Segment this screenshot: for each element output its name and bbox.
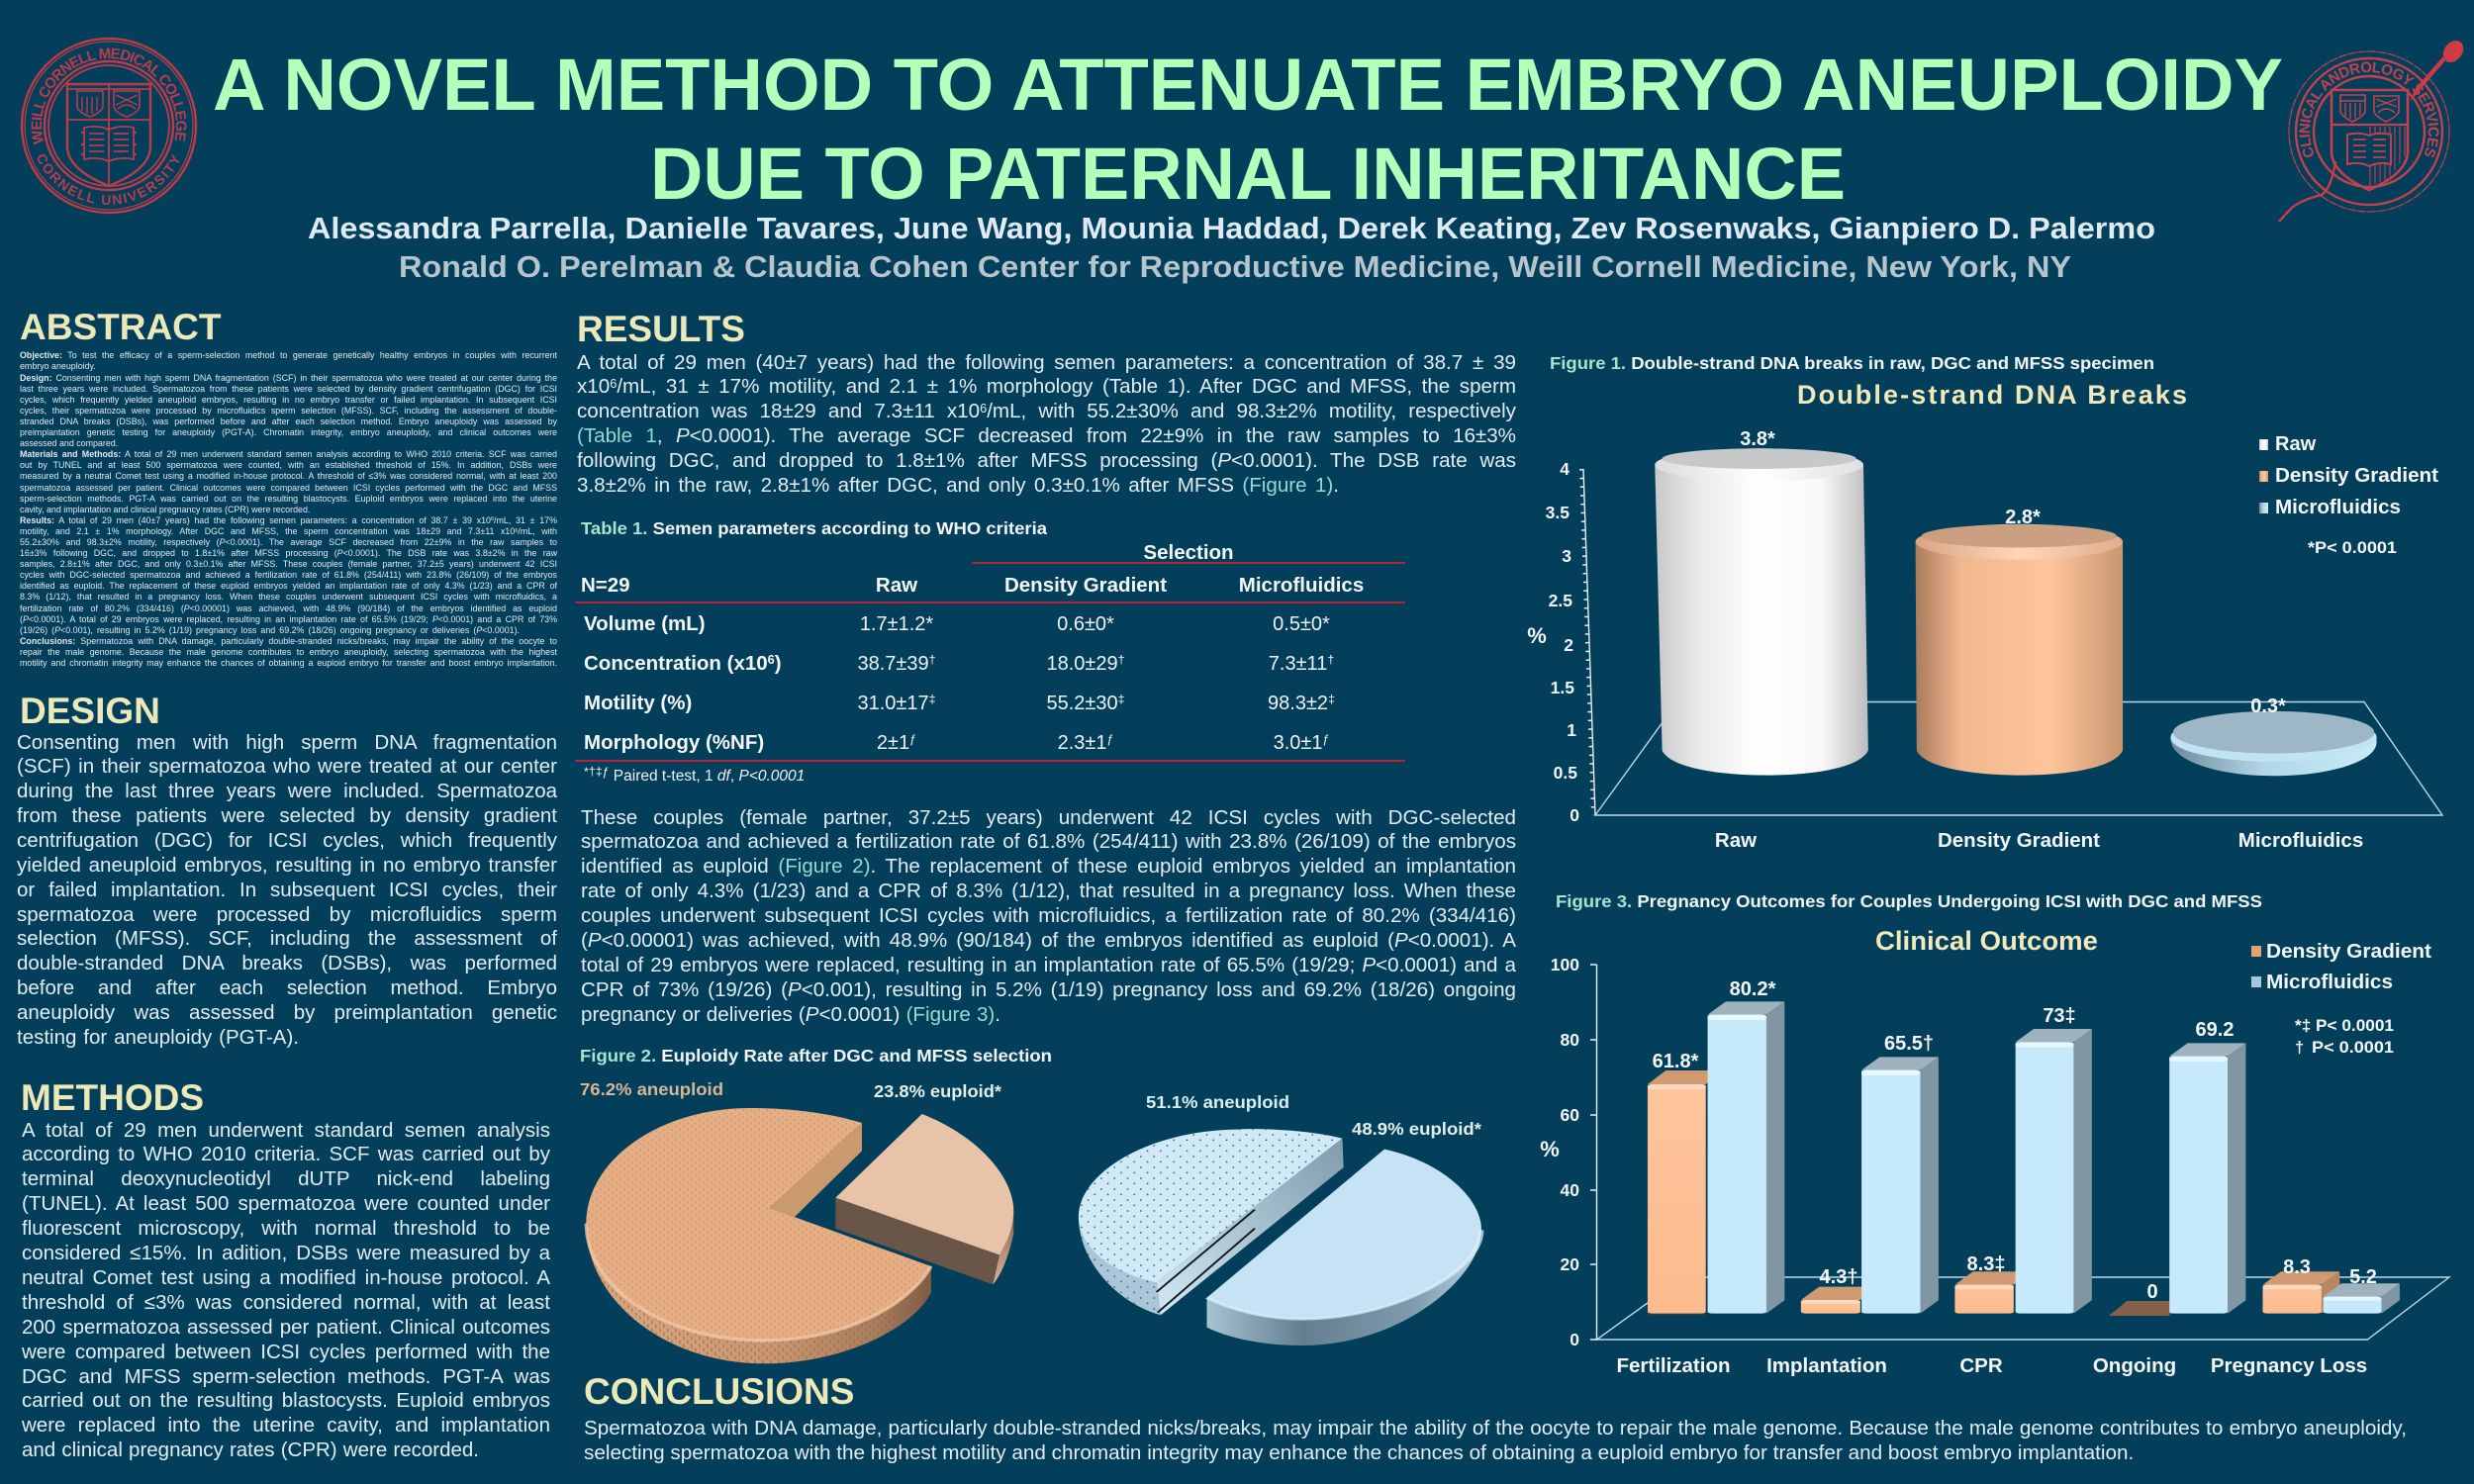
text block: design: before and after each selection method. Embryo [17,976,557,999]
text block: design: spermatozoa were processed by microfluidics sperm [17,902,557,926]
cylinder: microfluidics 0.3 [2170,711,2377,776]
category labels: Density Gradient [1938,829,2100,852]
figure 1: double-strand DNA breaks cylinder chart [1527,380,2444,852]
category labels: Implantation [1766,1354,1887,1377]
table 1: semen parameters: 55.2±30‡ [1046,693,1125,714]
text block: results part 2: identified as euploid (Figure 2). The replacement of these euploid embryos yielded an implantation [581,855,1516,878]
figure 1 caption: Figure 1. Double-strand DNA breaks in raw, DGC and MFSS specimen [1550,353,2154,373]
bars: fertilization [1648,1001,1784,1316]
y axis: % [1540,1137,1560,1161]
value labels: 2.8* [2005,507,2041,528]
text block: methods: A total of 29 men underwent standard semen analysis [22,1118,550,1142]
text block: results part 2 [581,805,1516,1026]
text block: methods: terminal deoxynucleotidyl dUTP nick-end labeling [22,1167,550,1190]
text block: results part 1: (Table 1, P<0.0001). The average SCF decreased from 22±9% in the raw samples to 16±3% [577,424,1516,447]
y axis: 2 [1564,635,1573,655]
table 1: semen parameters: Concentration (x106) [584,651,782,675]
legend: Microfluidics [2266,972,2393,993]
text block: abstract: Materials and Methods: A total of 29 men underwent standard semen analysis according to WHO 2010 criteria. SCF was carried [20,449,557,459]
legend: *P< 0.0001 [2308,539,2397,557]
text block: abstract: (P<0.0001). A total of 29 embryos were replaced, resulting in an implantation rate of 65.5% (19/29; P<0.0001) and a CPR of 73% [20,614,557,624]
text block: design: during the last three years were included. Spermatozoa [17,780,557,802]
text block: abstract: fertilization rate of 80.2% (334/416) (P<0.00001) was achieved, with 48.9% (90/184) of the embryos identified as euploid [20,603,557,613]
table 1: semen parameters: 7.3±11† [1269,653,1334,675]
pie: DGC 76.2% aneuploid, 23.8% euploid [586,1108,1013,1363]
text block: abstract: last three years were included. Spermatozoa from these patients were selected by density gradient centrifugation (DGC) for ICSI [20,384,557,394]
heading: abstract: ABSTRACT [20,307,221,347]
text block: design: aneuploidy was assessed by preimplantation genetic [17,1001,557,1024]
text block: results part 1: 3.8±2% in the raw, 2.8±1% after DGC, and only 0.3±0.1% after MFSS (Figure 1). [577,474,1339,497]
table 1: semen parameters: Morphology (%NF) [584,730,764,754]
legend [2259,433,2438,557]
text block: results part 2: CPR of 73% (19/26) (P<0.001), resulting in 5.2% (1/19) pregnancy loss and 69.2% (18/26) ongoing [581,978,1516,1001]
text block: abstract: cycles with DGC-selected spermatozoa and achieved a fertilization rate of 61.8% (254/411) with 23.8% (26/109) of the embryos [20,570,557,580]
value labels: 65.5† [1884,1033,1934,1055]
table 1: semen parameters: 2.3±1ƒ [1058,732,1113,754]
text block: methods: (TUNEL). At least 500 spermatozoa were counted under [22,1192,550,1215]
text block: results part 2: couples underwent subsequent ICSI cycles with microfluidics, a fertilization rate of 80.2% (334/416) [581,904,1516,927]
heading: methods: METHODS [21,1077,204,1118]
value labels: 4.3† [1820,1266,1857,1288]
value labels: 73‡ [2043,1005,2076,1027]
y axis: 80 [1561,1030,1579,1050]
text block: abstract: cycles, their spermatozoa were processed by microfluidics sperm selection (MFSS). SCF, including the assessment of double- [20,406,557,416]
text block: abstract: measured by a neutral Comet test using a modified in-house protocol. A threshold of ≤3% was considered normal, with at least 200 [20,471,557,481]
text block: abstract: Objective: To test the efficacy of a sperm-selection method to generate genetically healthy embryos in couples with recurrent [20,350,557,360]
text block: abstract: stranded DNA breaks (DSBs), was performed before and after each selection method. Embryo aneuploidy was assessed by [20,417,557,426]
text block: abstract: identified as euploid. The replacement of these euploid embryos yielded an implantation rate of only 4.3% (1/23) and a CPR of [20,581,557,591]
table 1: semen parameters: 31.0±17‡ [857,693,936,714]
text block: results part 2: (P<0.00001) was achieved, with 48.9% (90/184) of the embryos identified as euploid (P<0.0001). A [581,929,1516,952]
cylinder: density gradient 2.8 [1916,524,2123,776]
table 1: semen parameters: Selection [1143,540,1234,564]
y axis: 60 [1561,1105,1579,1125]
logo: Weill Cornell Medical College seal [20,38,198,214]
text block: abstract: Conclusions: Spermatozoa with DNA damage, particularly double-stranded nicks/breaks, may impair the ability of the oocyte to [20,636,557,646]
table 1: semen parameters: Volume (mL) [584,611,706,635]
table 1: semen parameters: Density Gradient [1004,574,1167,596]
text block: design: centrifugation (DGC) for ICSI cycles, which frequently [17,829,557,852]
text block: results part 1 [577,350,1516,497]
value labels: 5.2 [2349,1266,2377,1288]
category labels [1715,829,2363,852]
text block: methods: 200 spermatozoa assessed per patient. Clinical outcomes [22,1316,550,1339]
table 1: semen parameters: 1.7±1.2* [860,613,933,635]
category labels: Ongoing [2093,1354,2176,1377]
text block: methods: according to WHO 2010 criteria. SCF was carried out by [22,1143,550,1165]
table 1: semen parameters: 0.6±0* [1057,613,1114,635]
text block: design: yielded aneuploid embryos, resulting in no embryo transfer [17,854,557,877]
category labels: CPR [1959,1354,2003,1377]
pie labels: 23.8% euploid* [874,1081,1001,1101]
text block: methods: were replaced into the uterine cavity, and implantation [22,1414,550,1437]
text block: abstract: cavity, and implantation and clinical pregnancy rates (CPR) were recorded. [20,505,310,514]
value labels [1740,428,2286,717]
text block: abstract: 8.3% (1/12), that resulted in a pregnancy loss. When these couples underwent subsequent ICSI cycles with microfluidics, a [20,592,557,602]
value labels [1653,978,2377,1303]
category labels: Raw [1715,829,1757,852]
table 1: semen parameters: Raw [876,574,917,596]
title [213,44,2283,215]
authors: Alessandra Parrella, Danielle Tavares, June Wang, Mounia Haddad, Derek Keating, Zev Rosenwaks, Gianpiero D. Palermo [308,211,2155,245]
title: DUE TO PATERNAL INHERITANCE [650,133,1846,215]
y axis: 0 [1570,1330,1579,1349]
value labels: 8.3‡ [1967,1253,2005,1275]
table 1: semen parameters: 3.0±1ƒ [1274,732,1329,754]
table 1: semen parameters: 38.7±39† [857,653,936,675]
figure 2 caption: Figure 2. Euploidy Rate after DGC and MFSS selection [580,1046,1052,1066]
text block: design: Consenting men with high sperm DNA fragmentation [17,731,557,754]
text block: abstract: 16±3% following DGC, and dropped to 1.8±1% after MFSS processing (P<0.0001). The DSB rate was 3.8±2% in the raw [20,548,557,558]
heading: conclusions: CONCLUSIONS [584,1371,854,1412]
legend: *‡ P< 0.0001 [2295,1017,2394,1035]
text block: results part 1: x106/mL, 31 ± 17% motility, and 2.1 ± 1% morphology (Table 1). After DGC and MFSS, the sperm [577,375,1516,398]
legend: Density Gradient [2266,941,2431,963]
text block: design: from these patients were selected by density gradient [17,804,557,827]
legend: Microfluidics [2275,497,2401,518]
table 1: semen parameters [575,518,1405,785]
text block: abstract: motility, and 2.1 ± 1% morphology. After DGC and MFSS, the sperm concentration was 18±29 and 7.3±11 x106/mL, with [20,526,557,536]
table 1: semen parameters: *†‡ƒ Paired t-test, 1 df, P<0.0001 [584,765,805,785]
text block: design: double-stranded DNA breaks (DSBs), was performed [17,952,557,974]
table 1: semen parameters: N=29 [581,574,630,596]
text block: abstract: cycles, which frequently yielded aneuploid embryos, resulting in no embryo transfer or failed implantation. In subsequent ICSI [20,395,557,405]
text block: design: selection (MFSS). SCF, including the assessment of [17,927,557,950]
heading: design: DESIGN [20,691,160,731]
text block: methods [22,1118,550,1461]
cylinder: raw 3.8 [1655,448,1868,776]
y axis: 0 [1570,805,1579,825]
bars: pregnancy loss [2263,1271,2400,1314]
y axis [1540,955,1597,1349]
text block: abstract: samples, 2.8±1% after DGC, and only 0.3±0.1% after MFSS. These couples (female partner, 37.2±5 years) underwent 42 ICSI [20,559,557,569]
text block: design: testing for aneuploidy (PGT-A). [17,1026,299,1049]
table 1: semen parameters: Motility (%) [584,691,692,714]
text block: abstract: preimplantation genetic testing for aneuploidy (PGT-A). Chromatin integrity, embryo aneuploidy, and clinical outcomes were [20,427,557,437]
text block: abstract: (19/26) (P<0.001), resulting in 5.2% (1/19) pregnancy loss and 69.2% (18/26) ongoing pregnancy or deliveries (P<0.0001). [20,625,520,635]
bars: CPR [1954,1029,2092,1314]
text block: abstract: repair the male genome. Because the male genome contributes to embryo aneuploidy, selecting spermatozoa with the highest [20,647,557,657]
pie labels: 48.9% euploid* [1352,1119,1481,1139]
table 1: semen parameters: 2±1ƒ [877,732,916,754]
value labels: 8.3 [2283,1256,2311,1278]
title: A NOVEL METHOD TO ATTENUATE EMBRYO ANEUPLOIDY [213,44,2283,126]
logo: Weill Cornell Medical College seal: WEILL CORNELL MEDICAL COLLEGE [32,47,186,144]
text block: methods: and clinical pregnancy rates (CPR) were recorded. [22,1438,479,1461]
text block: abstract: spermatozoa assessed per patient. Clinical outcomes were compared between ICSI cycles performed with the DGC and MFSS [20,483,557,493]
chart title: Double-strand DNA Breaks [1797,380,2187,410]
pie labels: 76.2% aneuploid [580,1079,723,1099]
text block: abstract [20,350,558,668]
text block: conclusions [584,1417,2407,1464]
y axis: 100 [1551,955,1579,974]
text block: design: (SCF) in their spermatozoa who were treated at our center [17,755,557,778]
y axis: % [1527,623,1547,648]
affiliation: Ronald O. Perelman & Claudia Cohen Center for Reproductive Medicine, Weill Cornell Medicine, New York, NY [399,249,2071,284]
logo: Weill Cornell Medical College seal: CORNELL UNIVERSITY [38,154,180,206]
y axis: 4 [1560,459,1570,479]
value labels: 61.8* [1653,1051,1699,1072]
table 1: semen parameters: 0.5±0* [1273,613,1330,635]
text block: abstract: embryo aneuploidy. [20,361,96,371]
chart floor [1597,1277,2449,1340]
heading: results: RESULTS [577,309,745,349]
bars: ongoing [2109,1043,2245,1316]
y axis: 3.5 [1546,503,1570,522]
y axis [1527,459,1595,825]
y axis: 2.5 [1549,591,1572,610]
value labels: 3.8* [1740,428,1775,450]
y axis: 3 [1562,546,1571,566]
text block: methods: neutral Comet test using a modified in-house protocol. A [22,1266,550,1289]
figure 3: clinical outcome bar chart [1540,926,2451,1377]
y axis: 20 [1561,1254,1579,1274]
text block: methods: carried out on the resulting blastocysts. Euploid embryos [22,1389,550,1412]
legend: Density Gradient [2275,465,2438,487]
value labels: 69.2 [2196,1019,2234,1041]
text block: methods: DGC and MFSS sperm-selection methods. PGT-A was [22,1365,550,1388]
text block: results part 1: A total of 29 men (40±7 years) had the following semen parameters: a concentration of 38.7 ± 39 [577,350,1516,374]
text block: abstract: Design: Consenting men with high sperm DNA fragmentation (SCF) in their spermatozoa who were treated at our center during the [20,373,557,383]
table 1: semen parameters: 98.3±2‡ [1268,693,1335,714]
text block: abstract: assessed and compared. [20,438,118,448]
text block: design [17,731,558,1049]
text block: methods: threshold of ≤3% was considered normal, with at least [22,1291,550,1314]
text block: abstract: 55.2±30% and 98.3±2% motility, respectively (P<0.0001). The average SCF decreased from 22±9% in the raw samples to [20,537,557,547]
pie labels [580,1079,1481,1139]
text block: methods: considered ≤15%. In adition, DSBs were measured by a [22,1242,550,1264]
category labels: Pregnancy Loss [2211,1354,2367,1377]
text block: results part 2: pregnancy or deliveries (P<0.0001) (Figure 3). [581,1003,1000,1026]
category labels: Microfluidics [2238,829,2363,852]
logo: Clinical Andrology Services seal [2278,41,2464,223]
text block: results part 1: concentration was 18±29 and 7.3±11 x106/mL, with 55.2±30% and 98.3±2% motility, respectively [577,400,1516,422]
figure 3 caption: Figure 3. Pregnancy Outcomes for Couples Undergoing ICSI with DGC and MFSS [1556,891,2262,911]
table caption: Table 1. Semen parameters according to WHO criteria [581,518,1047,538]
legend: P< 0.0001 [2312,1039,2394,1057]
logo: Clinical Andrology Services seal: CLINICAL ANDROLOGY SERVICES [2300,61,2438,158]
value labels: 80.2* [1730,978,1776,1000]
text block: results part 2: spermatozoa and achieved a fertilization rate of 61.8% (254/411) with 23.8% (26/109) of the embryos [581,830,1516,853]
legend: Raw [2275,433,2317,455]
text block: abstract: out by TUNEL and at least 500 spermatozoa were counted, with an established threshold of 15%. In addition, DSBs were [20,460,557,470]
chart title: Clinical Outcome [1875,926,2098,956]
text block: results part 2: These couples (female partner, 37.2±5 years) underwent 42 ICSI cycles with DGC-selected [581,805,1516,829]
y axis: 0.5 [1554,763,1577,783]
y axis: 40 [1561,1180,1579,1200]
pie: MFSS 51.1% aneuploid, 48.9% euploid [1079,1129,1481,1345]
text block: results part 2: total of 29 embryos were replaced, resulting in an implantation rate of 65.5% (19/29; P<0.0001) and a [581,954,1516,976]
text block: abstract: sperm-selection methods. PGT-A was carried out on the resulting blastocysts. Euploid embryos were replaced into the uterine [20,494,557,504]
pie labels: 51.1% aneuploid [1146,1092,1289,1112]
bars: implantation [1801,1057,1939,1314]
y axis: 1 [1567,720,1576,740]
text block: results part 1: following DGC, and dropped to 1.8±1% after MFSS processing (P<0.0001). The DSB rate was [577,449,1516,472]
text block: abstract: Results: A total of 29 men (40±7 years) had the following semen parameters: a concentration of 38.7 ± 39 x106/mL, 31 ± 17% [20,515,557,525]
table 1: semen parameters: 18.0±29† [1046,653,1125,675]
legend [2251,941,2431,1057]
category labels: Fertilization [1616,1354,1731,1377]
text block: design: or failed implantation. In subsequent ICSI cycles, their [17,879,557,901]
chart floor [1595,702,2442,815]
figure 2: euploidy rate pie charts [580,1079,1484,1363]
text block: conclusions: Spermatozoa with DNA damage, particularly double-stranded nicks/breaks, may impair the ability of the oocyte to repair the male genome. Because the male genome contributes to embryo aneuploidy, [584,1417,2407,1438]
text block: conclusions: selecting spermatozoa with the highest motility and chromatin integrity may enhance the chances of obtaining a euploid embryo for transfer and boost embryo implantation. [584,1440,2134,1464]
value labels: 0.3* [2250,696,2286,717]
text block: methods: were compared between ICSI cycles performed with the [22,1341,550,1363]
text block: results part 2: rate of only 4.3% (1/23) and a CPR of 8.3% (1/12), that resulted in a pregnancy loss. When these [581,880,1516,902]
value labels: 0 [2146,1281,2158,1303]
text block: methods: fluorescent microscopy, with normal threshold to be [22,1217,550,1240]
legend: † [2295,1039,2304,1057]
y axis: 1.5 [1551,678,1574,697]
category labels [1616,1354,2367,1377]
text block: abstract: motility and chromatin integrity may enhance the chances of obtaining a euploid embryo for transfer and boost embryo implantation. [20,658,557,668]
table 1: semen parameters: Microfluidics [1239,574,1364,596]
